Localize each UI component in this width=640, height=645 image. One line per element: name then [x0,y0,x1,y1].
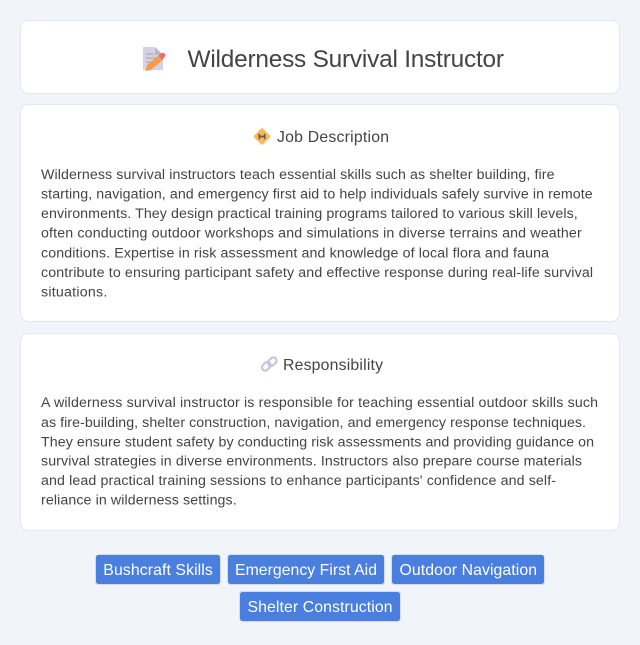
heading: responsibility: Responsibility [283,357,383,374]
text block: responsibility: as fire-building, shelter construction, navigation, and emergency response techniques. [41,415,586,431]
panel: responsibility [20,334,620,530]
text block: responsibility: A wilderness survival instructor is responsible for teaching essential outdoor skills such [41,395,598,411]
icon: orange diamond [253,128,271,145]
text block: job description: often conducting outdoor workshops and simulations in diverse terrains and weather [41,226,582,242]
text block: job description: Wilderness survival instructors teach essential skills such as shelter building, fire [41,167,555,183]
icon: chain link [261,356,278,372]
text block: job description: situations. [41,284,107,300]
tag: outdoor navigation: Outdoor Navigation [400,562,537,579]
text block: responsibility: and lead practical training sessions to enhance participants' confidence and self- [41,473,556,489]
text block: job description [41,167,593,300]
text block: job description: environments. They design practical training programs tailored to various skill levels, [41,206,578,222]
text block: responsibility: They ensure student safety by conducting risk assessments and providing guidance on [41,434,594,450]
panel: job description [20,104,620,322]
text block: responsibility [41,395,598,508]
tag: shelter construction: Shelter Construction [248,599,392,616]
tag: bushcraft skills: Bushcraft Skills [103,562,213,579]
heading: job description: Job Description [277,129,389,146]
tag: emergency first aid [228,554,384,584]
text block: job description: conditions. Expertise in risk assessment and knowledge of local flora and fauna [41,246,549,262]
title: Wilderness Survival Instructor [188,46,504,73]
text block: responsibility: reliance in wilderness settings. [41,492,237,508]
panel: title card [20,20,620,94]
tag: outdoor navigation [392,554,544,584]
tag: bushcraft skills [96,554,220,584]
text block: job description: starting, navigation, and emergency first aid to help individuals safely survive in remote [41,186,593,202]
tag: emergency first aid: Emergency First Aid [235,562,377,579]
text block: responsibility: survival strategies in diverse environments. Instructors also prepare course materials [41,454,582,470]
text block: job description: contribute to ensuring participant safety and effective response during real-life survival [41,265,593,281]
tag: shelter construction [240,592,400,622]
icon: document with pencil [143,47,165,71]
